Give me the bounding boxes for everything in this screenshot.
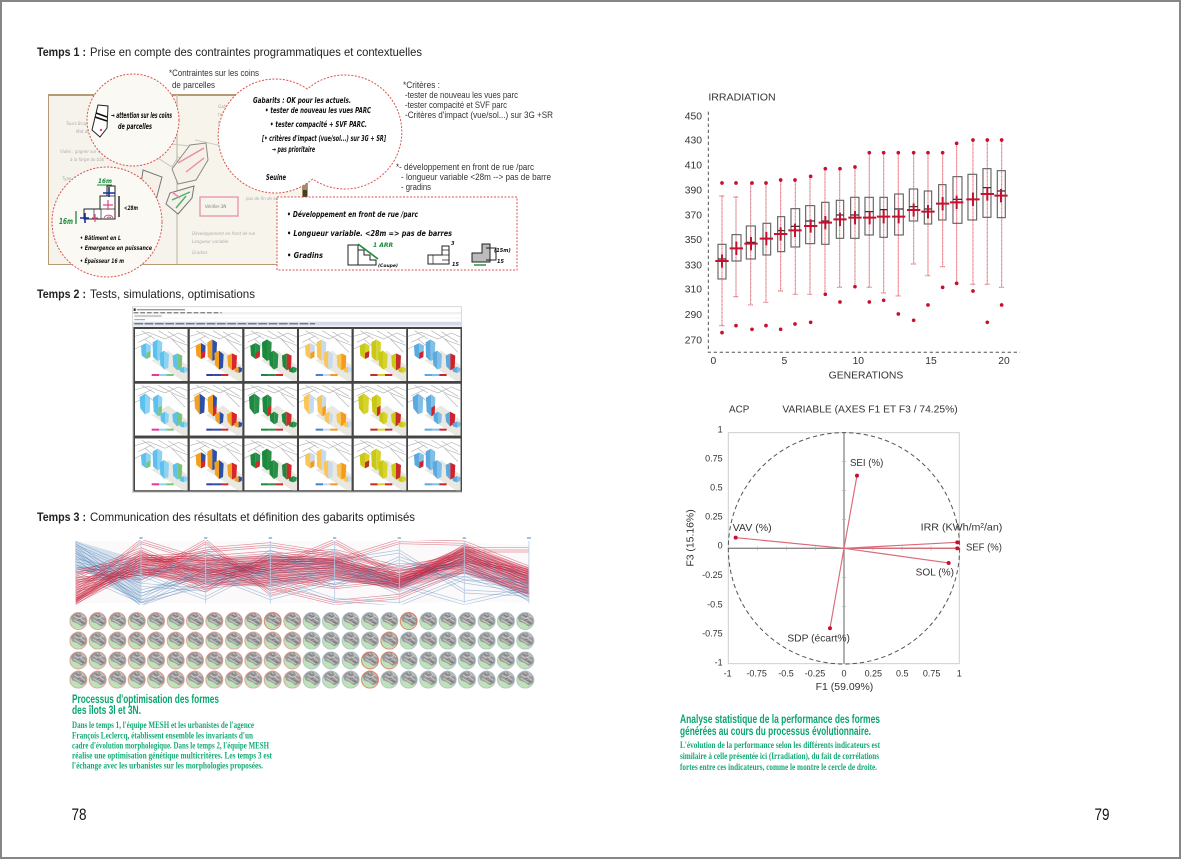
notebook: à la forge du bâti: [70, 157, 105, 162]
callout circle: coins de parcelles: de parcelles: [118, 122, 152, 131]
x tick labels: -0.5: [778, 669, 794, 679]
y tick labels: 1: [718, 425, 723, 435]
page number 79: 79: [1094, 805, 1110, 824]
caption: processus d'optimisation: [72, 694, 273, 772]
annotation: contraintes sur les coins: de parcelles: [172, 80, 215, 91]
axes: [76, 541, 529, 603]
x axis labels: 10: [853, 356, 864, 367]
annotation: contraintes sur les coins: *Contraintes sur les coins: [169, 68, 259, 79]
x tick labels: 0.5: [896, 669, 909, 679]
chart titles: VARIABLE (AXES F1 ET F3 / 74.25%): [782, 405, 958, 416]
callout box: développement: (15m): [494, 248, 511, 254]
panel: annotated notebook photo: [48, 74, 517, 277]
row 2 thumbnails: [135, 384, 461, 439]
caption: processus d'optimisation: Processus d'optimisation des formes: [72, 694, 219, 706]
notebook: Mat de parcelle: [76, 129, 108, 134]
axis titles: F3 (15.16%): [686, 509, 697, 567]
y axis labels: 430: [685, 136, 702, 147]
callout circle: bâtiment en L: • Épaisseur 16 m: [80, 256, 124, 265]
notebook: Tours Bray: [66, 121, 88, 126]
notebook: Vides : gagner sur les îlots: [60, 149, 113, 154]
heading: Temps 1: Prise en compte des contraintes programmatiques et contextuelles: [90, 45, 422, 59]
panel: simulation software screenshot: [132, 307, 462, 493]
annotation: développement en front de rue: - gradins: [401, 182, 431, 193]
x tick labels: 0.25: [865, 669, 882, 679]
variable labels: SDP (écart%): [787, 634, 850, 645]
chart: parallel coordinates: [76, 538, 531, 606]
x tick labels: 1: [957, 669, 962, 679]
y axis labels: 310: [685, 285, 702, 296]
callout box: développement: [277, 197, 517, 270]
heading: Temps 2: Temps 2 :: [37, 287, 86, 301]
notebook: Développement en front de rue: [192, 231, 256, 236]
axes: [708, 112, 1020, 352]
callout box: développement: (Coupe): [378, 263, 398, 269]
callout double circle: gabarits: Seuine: [266, 173, 286, 182]
chart: irradiation box plot: [685, 93, 1020, 382]
caption: processus d'optimisation: Dans le temps 1, l'équipe MESH et les urbanistes de l'agence: [72, 720, 254, 731]
y axis labels: 350: [685, 235, 702, 246]
annotation: critères: -tester de nouveau les vues parc: [405, 90, 518, 101]
annotation: critères: [403, 80, 553, 121]
callout box: développement: 1 ARR: [373, 242, 394, 249]
heading: Temps 1: Temps 1 :: [37, 45, 86, 59]
heading: Temps 3: Communication des résultats et définition des gabarits optimisés: [90, 510, 415, 524]
y tick labels: 0.5: [710, 482, 723, 492]
y tick labels: -1: [715, 657, 723, 667]
x axis labels: 5: [781, 356, 787, 367]
variable labels: VAV (%): [733, 523, 772, 534]
heading: Temps 3: Temps 3 :: [37, 510, 86, 524]
caption: processus d'optimisation: réalise une optimisation génétique multicritères. Les temps 3 est: [72, 750, 273, 762]
annotation: développement en front de rue: [396, 162, 551, 193]
callout circle: coins de parcelles: [87, 74, 179, 166]
notebook: Longueur variable: [192, 239, 229, 244]
notebook: Gabarits : OK pour: [218, 104, 255, 109]
callout box: développement: 3: [451, 241, 455, 247]
callout double circle: gabarits: [218, 75, 402, 193]
x axis title: GENERATIONS: [829, 371, 903, 382]
boxes: [715, 138, 1008, 334]
row 1: [69, 612, 534, 630]
callout circle: bâtiment en L: • Emergence en puissance: [80, 244, 152, 252]
caption: processus d'optimisation: l'échange avec les urbanistes sur les morphologies proposées.: [72, 760, 263, 772]
variable labels: SEI (%): [850, 458, 883, 469]
notebook: Vérifier 3N: [205, 204, 226, 209]
callout double circle: gabarits: • tester compacité + SVF PARC.: [270, 120, 367, 129]
notebook: critères d'impact: [218, 128, 252, 133]
x tick labels: 0.75: [923, 669, 940, 679]
y tick labels: -0.25: [702, 570, 723, 580]
y axis labels: 330: [685, 261, 702, 272]
variable labels: [733, 458, 1002, 645]
callout double circle: gabarits: → pas prioritaire: [272, 145, 315, 154]
annotation: critères: -Critères d'impact (vue/sol...) sur 3G +SR: [405, 110, 553, 121]
variable vectors: [734, 474, 959, 630]
chart title: IRRADIATION: [708, 93, 776, 104]
callout box: développement: 15: [452, 262, 459, 268]
row 3 thumbnails: [135, 438, 461, 493]
callout box: développement: • Développement en front de rue /parc: [287, 210, 418, 219]
callout circle: bâtiment en L: [52, 167, 162, 277]
caption: analyse statistique: Analyse statistique de la performance des formes: [680, 714, 880, 726]
notebook: Gradins: [192, 250, 207, 255]
x axis labels: 20: [998, 356, 1010, 367]
x tick labels: [724, 669, 962, 679]
page number 78: 78: [72, 805, 86, 824]
callout double circle: gabarits: [• critères d'impact (vue/sol...) sur 3G + SR]: [261, 134, 386, 143]
notebook: pas de fin de semaine: [245, 196, 291, 201]
x axis labels: [710, 356, 1010, 367]
annotation: développement en front de rue: - longueur variable <28m --> pas de barre: [401, 172, 551, 183]
variable labels: SOL (%): [916, 568, 954, 579]
callout circle: coins de parcelles: → attention sur les coins: [111, 111, 172, 120]
row 3: [69, 651, 534, 669]
caption: analyse statistique: générées au cours du processus évolutionnaire.: [680, 726, 871, 738]
annotation: développement en front de rue: *- développement en front de rue /parc: [396, 162, 534, 173]
caption: processus d'optimisation: cadre d'évolution morphologique. Dans le temps 2, l'équipe MESH: [72, 740, 269, 752]
callout circle: bâtiment en L: <28m: [124, 205, 138, 212]
notebook: Type 3: [62, 176, 76, 181]
thumbnails: grid of 96 generated forms: [69, 612, 534, 689]
caption: processus d'optimisation: des îlots 3l et 3N.: [72, 705, 141, 717]
caption: analyse statistique: fortes entre ces indicateurs, comme le montre le cercle de droite.: [680, 762, 877, 773]
y axis labels: 370: [685, 211, 702, 222]
y tick labels: 0.25: [705, 511, 723, 521]
callout box: développement: • Longueur variable. <28m => pas de barres: [287, 229, 452, 238]
x tick labels: -0.75: [746, 669, 767, 679]
x tick labels: -1: [724, 669, 732, 679]
y tick labels: 0: [718, 541, 723, 551]
callout box: développement: 15: [497, 259, 504, 265]
y axis labels: 450: [685, 111, 702, 122]
callout box: développement: • Gradins: [287, 251, 323, 260]
callout double circle: gabarits: • tester de nouveau les vues PARC: [265, 106, 371, 115]
row 4: [69, 671, 534, 689]
window toolbar: [132, 307, 462, 493]
y tick labels: -0.5: [707, 599, 723, 609]
chart: ACP correlation circle: [686, 405, 1002, 693]
y axis labels: 390: [685, 186, 702, 197]
heading: Temps 2: Tests, simulations, optimisations: [90, 287, 255, 301]
x axis labels: 15: [925, 356, 937, 367]
x tick labels: 0: [841, 669, 846, 679]
caption: analyse statistique: similaire à celle présentée ici (Irradiation), du fait de corrélations: [680, 751, 879, 762]
callout circle: bâtiment en L: • Bâtiment en L: [80, 234, 121, 242]
annotation: critères: -tester compacité et SVF parc: [405, 100, 507, 111]
notebook: [48, 94, 308, 265]
results grid: [133, 327, 462, 493]
notebook: tester compacité: [218, 112, 252, 117]
callout circle: bâtiment en L: 16m: [98, 178, 112, 185]
caption: processus d'optimisation: François Leclercq, établissent ensemble les invariants d'un: [72, 730, 253, 742]
plot frame and axes: [728, 433, 960, 664]
notebook: tester SVF PARC: [218, 120, 251, 125]
row 2: [69, 632, 534, 650]
y tick labels: -0.75: [702, 628, 723, 638]
axis titles: [686, 509, 873, 693]
annotation: contraintes sur les coins: [169, 68, 259, 91]
y axis labels: 270: [685, 336, 702, 347]
axis titles: F1 (59.09%): [816, 682, 873, 693]
annotation: critères: *Critères :: [403, 80, 440, 91]
y axis labels: 410: [685, 161, 702, 172]
x axis labels: 0: [710, 356, 716, 367]
y axis labels: 290: [685, 310, 702, 321]
caption: analyse statistique: L'évolution de la performance selon les différents indicateurs est: [680, 740, 881, 751]
row 1 thumbnails: [135, 329, 461, 384]
callout circle: bâtiment en L: 16m: [59, 217, 73, 226]
callout double circle: gabarits: Gabarits : OK pour les actuels.: [253, 96, 351, 105]
y tick labels: 0.75: [705, 453, 723, 463]
y tick labels: [702, 425, 723, 667]
caption: analyse statistique: [680, 714, 881, 773]
variable labels: IRR (KWh/m²/an): [921, 522, 1002, 533]
x tick labels: -0.25: [805, 669, 825, 679]
chart titles: ACP: [729, 405, 749, 416]
variable labels: SEF (%): [966, 542, 1002, 553]
y axis labels: [685, 111, 702, 347]
